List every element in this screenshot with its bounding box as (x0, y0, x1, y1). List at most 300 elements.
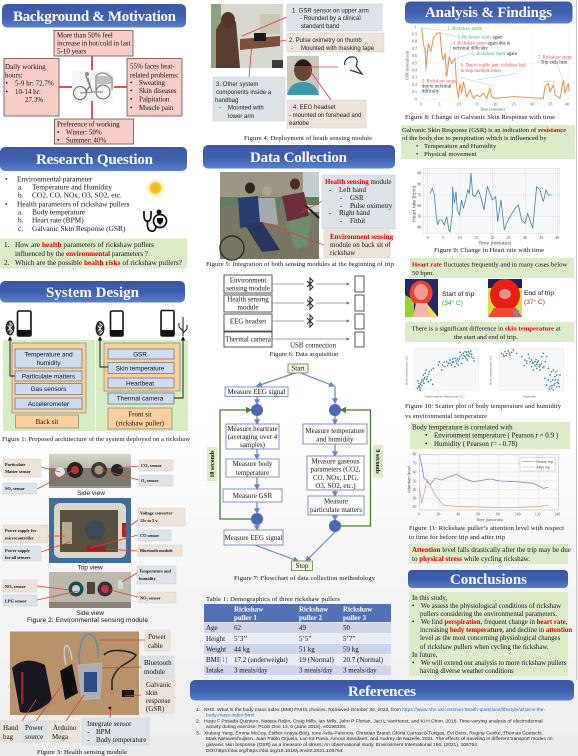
parameter list: a. (18, 182, 23, 192)
heading: research question: Research Question (36, 152, 154, 168)
heading: conclusions (408, 570, 568, 588)
chart: galvanic skin response: difficulty (422, 90, 440, 95)
label 1 (287, 4, 382, 31)
conclusions text: In this study, (412, 595, 447, 602)
diagram: system architecture: Gas sensors (31, 386, 66, 393)
arrows (10, 337, 15, 376)
sensor callouts (3, 459, 185, 606)
callout: heart rate: Heart rate fluctuates frequently and in many cases below (412, 262, 567, 268)
arduino label: Mega (52, 733, 69, 741)
callout: skin temperature: There is a significant difference in skin temperature at (411, 326, 561, 332)
chart: heart rate: Time (minutes) (478, 241, 512, 247)
diagram: figure 6 data acquisition: sensing module (226, 284, 270, 292)
callout: body temperature correlation: Humidity ( Pearson r= - 0.78) (434, 440, 518, 448)
phones (18, 310, 174, 336)
chart: galvanic skin response: 20 (493, 101, 497, 106)
parameter list: Body temperature (32, 208, 86, 216)
chart: scatter environmental temperature (404, 348, 478, 399)
diagram: figure 6 data acquisition: module (238, 304, 258, 312)
caption: figure 3: Figure 3: Health sensing module (37, 749, 127, 756)
bluetooth icons (6, 320, 104, 336)
callout: gsr explanation: Temperature and Humidity (424, 143, 497, 150)
sensor callouts: NO₂ sensor (140, 596, 161, 600)
sensor callouts: Particulate (5, 462, 25, 467)
integrate sensor label: BPM (96, 728, 112, 736)
integrate sensor label: Body temperature (96, 736, 146, 744)
callout: research questions: Which are the possible health risks of rickshaw pullers? (15, 259, 182, 267)
conclusions text (409, 592, 572, 676)
diagram: system architecture: Particulate matters (22, 374, 75, 380)
callout: body temperature correlation: Body temperature is correlated with (412, 424, 513, 432)
photo: side view top (49, 454, 131, 488)
diagram: figure 6 data acquisition: USB connection (290, 342, 337, 350)
parameter list: Heart rate (BPM) (32, 216, 84, 224)
flowchart: figure 7: samples) (240, 441, 266, 449)
parameter list: CO2, CO, NOx, O3, SO2, etc. (32, 190, 122, 200)
parameter list: Temperature and Humidity (32, 182, 112, 192)
hand bag label (0, 721, 21, 742)
callout: gsr explanation: • (416, 143, 418, 150)
caption: figure 7: Figure 7: Flowchart of data collection methodology (234, 575, 376, 582)
integrate sensor label: - (87, 728, 90, 736)
box: climate perception: increase in hot/cold in last (57, 40, 131, 48)
sensor callouts: Matter sensor (5, 469, 31, 474)
chart: galvanic skin response: 0.6 (412, 53, 417, 58)
label: environment sensing module: rickshaw (330, 249, 356, 257)
box: daily working hours: • (6, 80, 8, 88)
table: demographics: Rickshaw (234, 606, 264, 614)
chart: scatter humidity (489, 348, 564, 399)
sensor callouts: LPG sensor (5, 598, 27, 604)
callout: research questions: 1. (4, 241, 10, 249)
sensor callouts: CO sensor (140, 533, 159, 538)
flowchart: figure 7: Stop (296, 562, 309, 570)
panel: system design (0, 281, 190, 443)
label: health sensing module: Pulse oximetry (350, 202, 393, 210)
thermal image: start of trip (405, 279, 438, 317)
heading: data collection: Data Collection (250, 150, 348, 166)
chart: galvanic skin response: 4. Rickshaw stops again due to (453, 41, 511, 46)
table: demographics: 5’3’’ (234, 635, 247, 643)
chart: scatter environmental temperature: Body temperature (C) (404, 356, 408, 385)
chart: attention level: 60 (413, 470, 416, 474)
callout: body temperature correlation (410, 422, 570, 449)
parameter list: Environmental parameter (17, 174, 93, 184)
table: demographics: 20.7 (Normal) (343, 656, 384, 664)
icon: sun (146, 178, 166, 198)
sensor callouts: CO₂ sensor (141, 463, 162, 468)
chart: heart rate: 80 (417, 181, 421, 186)
chart: attention level: 80 (413, 453, 416, 457)
diagram: system architecture: (rickshaw puller) (116, 420, 165, 428)
reference list: Mark Nieuwenhuijsen, Juan Pablo Orjuela, Luc Int Panis, Arnout Standaert, and Audrey de Nazelle. 2021. The effects of traveling in different transport modes on (206, 736, 553, 742)
heading: background and motivation: Background & Motivation (13, 9, 177, 25)
chart: scatter humidity: Body temperature (C) (489, 356, 493, 385)
parameter list: Galvanic Skin Response (GSR) (32, 224, 126, 233)
table: demographics: Table 1: Demographics of three rickshaw pullers (206, 596, 340, 603)
power cable label: Power (148, 633, 167, 641)
label 3: lower arm (228, 114, 254, 120)
box: preference of working: • (57, 136, 60, 144)
table: demographics: Age (206, 624, 218, 632)
chart: galvanic skin response: Time (minutes) (480, 106, 505, 111)
caption: figure 11 (409, 525, 564, 541)
chart: attention level: 20 (413, 505, 416, 509)
flowchart: figure 7: Measure GSR (233, 492, 273, 500)
label: top view: Top view (77, 564, 103, 572)
label 3 (213, 77, 285, 121)
box: heat related problems: 55% faces heat- (130, 62, 175, 70)
box: daily working hours (4, 58, 59, 116)
box: climate perception: More than 50% feel (57, 32, 113, 40)
connector arrows around rickshaw (59, 56, 127, 119)
flowchart: figure 7: 9 seconds (374, 449, 380, 474)
flowchart: figure 7: O3, SO2, etc.) (315, 482, 356, 490)
callout: heart rate (410, 258, 574, 278)
chart: heart rate: 0 (427, 235, 429, 240)
chart: heart rate: 15 (474, 235, 478, 240)
sensor callouts: for all sensors (5, 555, 31, 560)
parameter list: b. (18, 190, 24, 200)
callout: attention level: to physical stress while cycling rickshaw. (412, 555, 530, 563)
chart: galvanic skin response: 0.5 (412, 60, 417, 65)
label: environment sensing module (324, 230, 394, 258)
label 4: 4. EEG headset (293, 105, 336, 111)
label: health sensing module: - (340, 217, 343, 225)
panel: conclusions (408, 570, 572, 676)
heading: references (190, 680, 574, 700)
bluetooth module label (141, 656, 174, 677)
chart: galvanic skin response (405, 24, 572, 111)
integrate sensor label: - (87, 736, 90, 744)
table: demographics: Rickshaw (343, 606, 373, 614)
heading: analysis and findings: Analysis & Findings (425, 5, 552, 21)
label 3: Mounted with (228, 106, 264, 112)
figure 4: deployment of health sensing module (211, 4, 384, 142)
callout: heart rate: 50 bpm. (412, 270, 434, 277)
chart: heart rate: 30 (523, 235, 527, 240)
panel: references (190, 680, 574, 754)
box: heat related problems: Skin diseases (139, 87, 177, 95)
label: start of trip: (34° C) (442, 299, 463, 307)
heading: system design (0, 281, 185, 302)
chart: attention level: 50 (413, 479, 416, 483)
icon: cycle rickshaw (72, 70, 113, 101)
callout lines (262, 201, 324, 245)
photo: top view (49, 498, 131, 563)
caption: figure 10: Figure 10: Scatter plot of body temperature and humidity (405, 403, 562, 410)
conclusions text: pullers considering the environmental parameters. (420, 611, 557, 618)
flowchart: figure 7 (207, 364, 383, 570)
panel: data collection (203, 145, 395, 582)
diagram: figure 6 data acquisition: Health sensing (227, 296, 269, 304)
power cable label (145, 630, 170, 651)
label 1: - Rounded by a clinical (300, 16, 361, 22)
chart: attention level: 40 (456, 513, 460, 517)
box: heat related problems: • (130, 79, 133, 87)
chart: galvanic skin response: GSR (normalized) (405, 50, 410, 80)
parameter list: • (5, 174, 8, 184)
box: preference of working: • (57, 128, 60, 136)
sensor callouts: Voltage converter (140, 510, 173, 516)
chart: galvanic skin response: 0 (415, 96, 417, 101)
table: demographics: 49 (299, 624, 306, 632)
photo: face with eeg headset (287, 56, 319, 95)
diagram: figure 6 data acquisition: Thermal camera (225, 336, 272, 344)
diagram: figure 6 data acquisition: Figure 6: Data acquisition (270, 351, 339, 358)
callout: research questions (0, 238, 187, 268)
box: preference of working: Winter: 50% (66, 128, 102, 136)
conclusions text: having diverse weather conditions (420, 668, 514, 675)
label 1: standard band (301, 24, 339, 30)
label: end of trip: (37° C) (524, 298, 545, 306)
table: demographics: puller 1 (234, 614, 258, 622)
chart: attention level: Time (seconds) (476, 517, 504, 522)
box: daily working hours: 5-9 hr: 72.7% (15, 80, 54, 88)
label: side view: Side view (77, 490, 105, 497)
chart: attention level: Attention level (406, 466, 411, 493)
reference list: Hugo F Posada-Quintero, Natasa Reljin, Craig Mills, Ian Mills, John P Florian, Jaci L VanHeest, and Ki H Chon. 2018. Time-varying analysis of electrodermal (204, 718, 543, 724)
table: demographics: 5’7” (343, 635, 355, 643)
diagram: system architecture: Heartbeat (126, 380, 154, 388)
callout: body temperature correlation: Environment temperature ( Pearson r = 0.9 ) (434, 432, 559, 440)
diagram: system architecture: GSR (133, 352, 147, 358)
flowchart: figure 7: Start (291, 364, 305, 372)
flowchart: figure 7: Measure temperature (305, 427, 365, 435)
conclusions text: increasing body temperature, and decline in attention (420, 627, 572, 634)
bluetooth module label: module (144, 668, 165, 676)
diagram: system architecture: Temperature and (24, 352, 73, 358)
heading: system design: System Design (46, 285, 140, 301)
chart: attention level: 30 (413, 497, 416, 501)
callout: gsr explanation: Physical movement (424, 151, 477, 158)
reference list: activity during exercise. PLoS One 13, 6 (June 2018), e0198328. (206, 724, 346, 730)
sensor callouts: SO₂ sensor (5, 486, 25, 491)
sensor callouts: microcontroller (5, 536, 34, 540)
diagram: system architecture: humidity (37, 360, 61, 367)
table: demographics: 3 meals/day (299, 666, 333, 674)
label: side view bottom: Side view (76, 610, 104, 617)
hand bag label: Hand (3, 724, 19, 732)
callout: research questions: influenced by the environmental parameters ? (15, 250, 148, 258)
box: heat related problems: • (130, 104, 133, 112)
chart: attention level: 60 (476, 513, 480, 517)
chart: heart rate: 40 (555, 235, 559, 240)
sensor callouts: Power supply for (5, 528, 37, 533)
chart: galvanic skin response: due to technical (422, 85, 452, 90)
box: daily working hours: Daily working (5, 63, 46, 71)
label: health sensing module: GSR (350, 194, 364, 202)
conclusions text: We will extend our analysis to more rickshaw pullers (421, 660, 567, 667)
callout: skin temperature: the start and end of trip. (454, 334, 518, 341)
reference list: NHS. What is the body mass index (BMI) FNHS choices. Retrieved October 30, 2022, from https://www.nhs.uk/common-health-questions/lifestyle/what-is-the- (204, 707, 546, 713)
label 3: 3. Other system (216, 82, 258, 88)
caption: figure 11: Figure 11: Rickshaw puller’s attention level with respect (409, 525, 564, 532)
callout: gsr explanation (401, 125, 575, 159)
sensor callouts: humidity (139, 576, 157, 581)
label 4: - mounted on forehead and (289, 113, 361, 119)
chart: heart rate: 90 (417, 171, 421, 176)
chart: galvanic skin response: 0.2 (412, 82, 417, 87)
callout: research questions: How are health parameters of rickshaw pullers (15, 241, 154, 249)
chart: heart rate: 50 (417, 214, 421, 219)
chart: galvanic skin response: 25 (512, 101, 516, 106)
reference list: body-mass-index-bmi/ (206, 712, 255, 718)
photo: arm with gsr sensor (211, 4, 283, 68)
diagram: system architecture: Back sit (36, 418, 58, 426)
label: health sensing module: Health sensing module (325, 178, 392, 186)
diagram: figure 6 data acquisition: Environment (230, 276, 266, 284)
caption: figure 5: Figure 5: Integration of both sensing modules at the beginning of trip (206, 261, 395, 268)
parameter list: c. (18, 224, 23, 233)
label: health sensing module: - (340, 194, 343, 202)
flowchart: figure 7: Measure (324, 498, 348, 506)
callout: attention level: Attention level falls drastically after the trip may be due (412, 546, 571, 554)
conclusions text: level as the most concerning physiological changes (420, 635, 561, 642)
chart: galvanic skin response: 30 (530, 101, 534, 106)
table: demographics: 3 meals/day (343, 666, 377, 674)
flowchart: figure 7: temperature (236, 469, 269, 477)
label 3: handbag (215, 98, 238, 104)
sensor callouts: NO₂ sensor (5, 584, 26, 589)
flowchart: figure 7: Measure heartrate (227, 425, 278, 433)
conclusions text: We assess the physiological conditions of rickshaw (421, 603, 561, 610)
conclusions text: of rickshaw pullers when cycling the rickshaw. (420, 644, 549, 651)
thermal image: end of trip (488, 279, 522, 317)
chart: galvanic skin response: 40 (565, 101, 569, 106)
flowchart: figure 7: Measure gaseous (311, 458, 360, 466)
sensor callouts: Power supply (5, 548, 31, 553)
icon: usb (179, 317, 187, 336)
bluetooth module label: Bluetooth (144, 659, 172, 667)
table: demographics: 62 (234, 624, 242, 632)
callout: gsr explanation: • (416, 151, 418, 158)
label: environment sensing module: module on back sit of (330, 241, 391, 249)
chart: galvanic skin response: 7. Rickshaw stops (538, 55, 572, 60)
conclusions text: In future, (412, 652, 438, 659)
chart: attention level: 120 (535, 513, 541, 517)
box: climate perception: 5-10 years (57, 48, 87, 56)
box: heat related problems: related problems: (130, 72, 179, 80)
chart: heart rate: 70 (417, 192, 421, 197)
gsr label (141, 678, 174, 713)
box: heat related problems: Muscle pain (139, 104, 174, 112)
box: heat related problems: Sweating (139, 79, 166, 87)
chart: galvanic skin response: to stop multiple times (461, 69, 501, 74)
conclusions text: We find perspiration, frequent change in heart rate, (421, 619, 568, 626)
label 4 (287, 100, 366, 128)
label: health sensing module (322, 175, 395, 229)
table: demographics: 44 kg (234, 646, 250, 654)
photo: health module kit (10, 632, 139, 715)
chart: galvanic skin response: 0.1 (412, 89, 417, 94)
callout: body temperature correlation: • (425, 432, 428, 440)
conclusions text: • (412, 660, 415, 667)
callout: attention level (409, 544, 571, 564)
flowchart: figure 7: (averaging over 4 (228, 433, 278, 441)
label 2 (287, 33, 384, 52)
parameter list: Health parameters of rickshaw pullers (17, 200, 130, 208)
callout lines (22, 640, 145, 721)
power source label: Power (25, 724, 44, 732)
photo: rickshaw with sensing modules (220, 172, 319, 260)
arduino label: Arduino (53, 724, 77, 732)
table: demographics (204, 596, 391, 675)
flowchart: figure 7: Measure EEG signal (225, 534, 283, 542)
gsr label: (GSR) (146, 705, 165, 713)
box: heat related problems: Palpitation (139, 96, 170, 104)
box: heat related problems: • (130, 87, 133, 95)
chart: galvanic skin response: 3. Rickshaw starts again (457, 35, 503, 40)
table: demographics: Height (206, 635, 225, 643)
chart: galvanic skin response: 6. Due to traffic jam, rickshaw had (461, 64, 526, 69)
box: preference of working: Preference of working (57, 120, 120, 128)
diagram: figure 6 data acquisition (224, 275, 364, 358)
caption: figure 9: Figure 9: Change in Heart rate with time (434, 247, 544, 254)
panel: background and motivation (2, 4, 186, 144)
chart: heart rate (411, 168, 559, 247)
chart: galvanic skin response: 1. Rickshaw starts (448, 27, 482, 32)
parameter list: a. (18, 208, 23, 216)
arduino label (49, 721, 79, 742)
table: demographics: BMI[1] (206, 656, 227, 664)
diagram: system architecture: Thermal camera (117, 396, 164, 402)
power cable label: cable (148, 642, 163, 650)
callout: skin temperature (405, 322, 574, 342)
label: health sensing module: - (329, 186, 332, 194)
chart: galvanic skin response: 0.8 (412, 39, 417, 44)
sensor callouts: Bluetooth module (140, 548, 173, 553)
chart: galvanic skin response: 10 (457, 101, 461, 106)
chart: galvanic skin response: technical difficulty (453, 46, 489, 51)
table: demographics: 19 (Normal) (299, 656, 334, 664)
table: demographics: 59 kg (343, 646, 359, 654)
conclusions text: • (412, 603, 415, 610)
chart: galvanic skin response: 0.4 (412, 68, 417, 73)
integrate sensor label: Integrate sensor (87, 720, 132, 728)
caption: figure 10: vs environmental temperature (405, 413, 487, 420)
heading: analysis and findings (405, 2, 572, 24)
caption: figure 1: Figure 1: Proposed architecture of the system deployed on a rickshaw (2, 436, 190, 443)
chart: attention level: 100 (515, 513, 521, 517)
flowchart: figure 7: 10 seconds (210, 450, 216, 478)
flowchart: figure 7: particulate matters (310, 506, 362, 514)
box: climate perception (54, 30, 133, 56)
parameter list: • (5, 200, 8, 208)
chart: attention level: After trip (536, 465, 550, 469)
chart: heart rate: 25 (507, 235, 511, 240)
label 4: earlobe (289, 121, 310, 127)
table: demographics: puller 3 (343, 614, 367, 622)
table: demographics: Weight (206, 646, 226, 654)
figure 3: health sensing module (0, 630, 174, 756)
label: health sensing module: - (329, 209, 332, 217)
caption: figure 8: Figure 8: Change in Galvanic Skin Response with time (405, 114, 555, 121)
box: daily working hours: 10-14 hr: (15, 88, 41, 96)
heading: data collection (203, 145, 395, 168)
flowchart: figure 7: Measure EEG signal (228, 388, 286, 396)
hand bag label: bag (3, 733, 14, 741)
reference list: 2. (196, 718, 200, 724)
box: preference of working (54, 119, 134, 144)
reference list: 1. (196, 707, 200, 713)
chart: heart rate: Heart rate (bpm) (411, 185, 417, 222)
heading: conclusions: Conclusions (450, 572, 527, 588)
chart: attention level: 140 (554, 513, 560, 517)
chart: attention level: 70 (413, 462, 416, 466)
chart: galvanic skin response: 1 (415, 24, 417, 29)
flowchart: figure 7: and humidity (316, 436, 354, 444)
